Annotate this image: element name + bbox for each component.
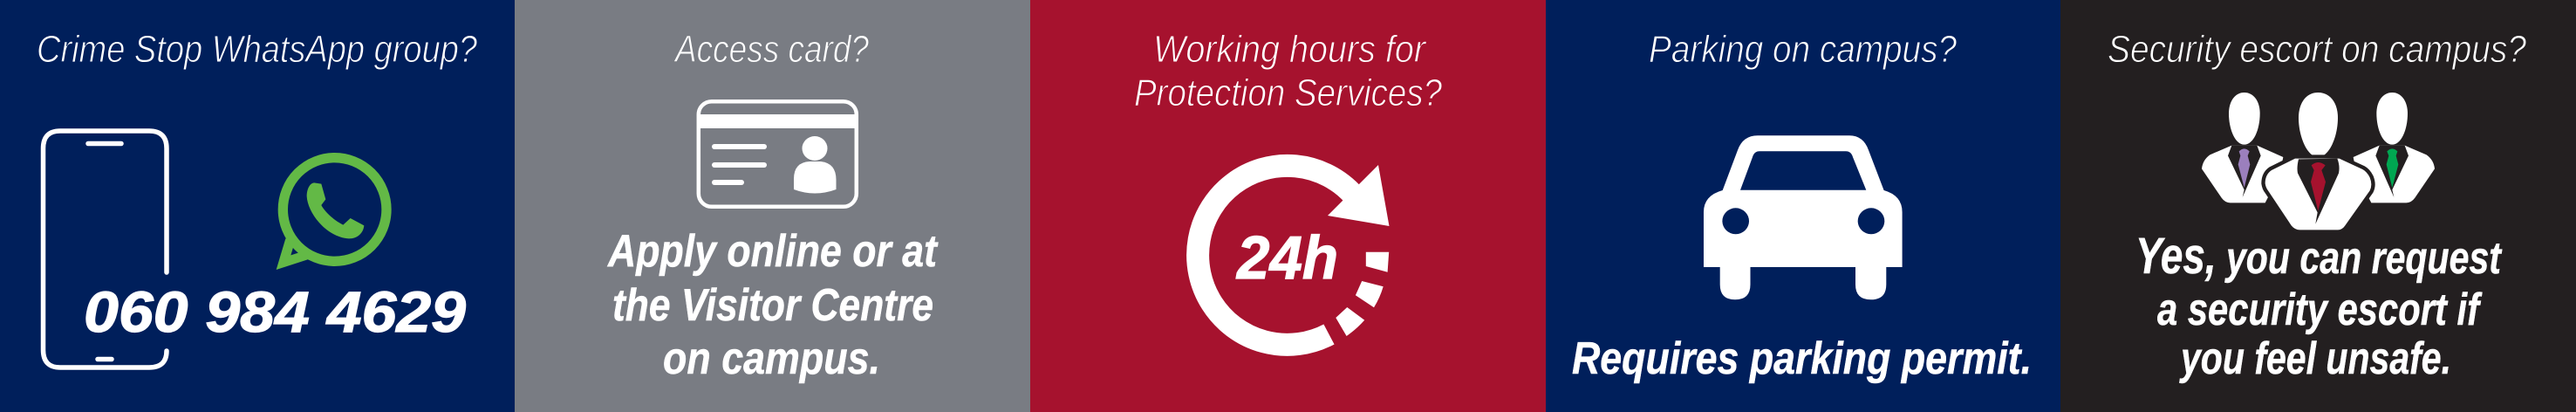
answer: Apply online or at the Visitor Centre on campus [606,226,939,384]
answer: Yes, you can request a security escort if you feel unsafe [2135,228,2503,384]
answer: Apply online or at the Visitor Centre on campus: on campus. [663,333,880,384]
phone number: 060 984 4629 [84,279,466,344]
panel: Access card [515,0,1030,412]
answer: Yes, you can request a security escort if you feel unsafe: a security escort if [2157,285,2483,335]
icon: ID card [698,101,858,207]
answer: Apply online or at the Visitor Centre on campus: Apply online or at [606,226,939,277]
guard with purple tie [2202,93,2283,203]
panel: Parking on campus [1546,0,2060,412]
heading: Security escort on campus: Security escort on campus? [2108,28,2526,71]
answer: Yes, you can request a security escort if you feel unsafe: Yes, you can request [2135,228,2503,285]
answer: Requires parking permit: Requires parking permit. [1572,333,2032,384]
icon: three security guards in suits [2202,93,2435,230]
answer: Yes, you can request a security escort if you feel unsafe: you feel unsafe. [2179,333,2451,384]
icon: smartphone outline [44,131,167,367]
heading: Crime Stop WhatsApp group: Crime Stop WhatsApp group? [37,28,477,71]
heading: Working hours for Protection Services: Working hours for [1153,28,1427,71]
label: 24h: 24h [1235,223,1338,292]
heading: Parking on campus: Parking on campus? [1649,28,1957,71]
guard with red tie [2265,93,2371,230]
icon: 24 hour circular arrow [1198,165,1389,345]
icon: WhatsApp logo [277,158,386,270]
heading: Access card: Access card? [673,28,869,71]
guard with green tie [2354,93,2435,203]
heading: Working hours for Protection Services: Protection Services? [1134,72,1442,114]
panel: Working hours [1030,0,1546,412]
panel: Security escort on campus [2060,0,2576,412]
heading: Working hours for Protection Services [1134,28,1442,114]
answer: Apply online or at the Visitor Centre on campus: the Visitor Centre [612,280,933,331]
panel: Crime Stop WhatsApp group [0,0,515,412]
icon: car front view [1704,135,1903,299]
